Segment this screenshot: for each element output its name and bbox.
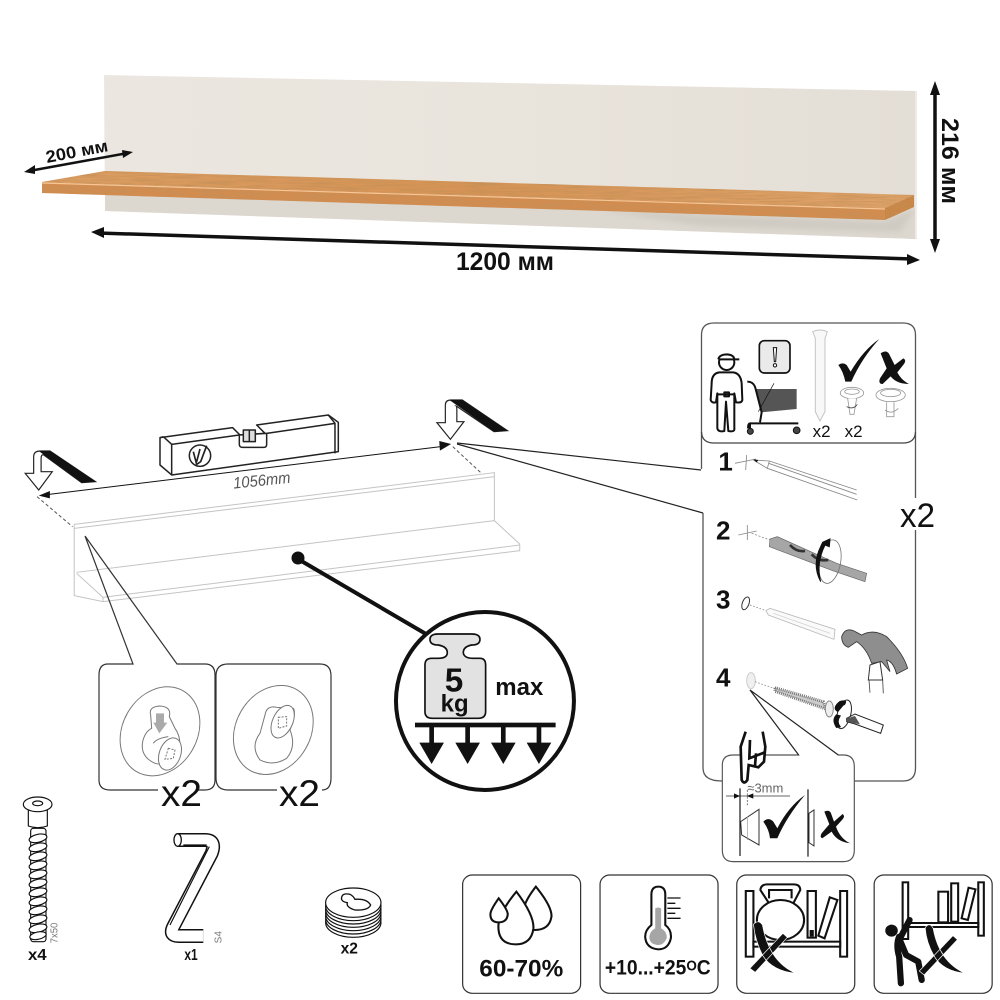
label: x2 left: x2: [161, 773, 202, 814]
badge circle: kg: [441, 690, 469, 717]
dimension: 200 mm depth: 200 мм: [44, 136, 110, 167]
dimension: 200 mm depth: [24, 136, 133, 174]
dimension arrow: 1056mm: [37, 441, 482, 527]
icon: correct screw: [840, 387, 864, 414]
product photo: wall shelf: [42, 75, 917, 239]
icon: wall plug: [813, 330, 827, 421]
badge circle: 5: [445, 663, 463, 700]
icon: wrong screw: [876, 388, 905, 417]
icon: check mark correct: [763, 795, 805, 838]
icon: cross mark: [879, 352, 909, 384]
step 1: pencil marking: [718, 446, 857, 500]
line drawing of shelf: [74, 473, 520, 602]
card: temperature: +10...+25: [605, 956, 697, 979]
step 4: driving screw: [716, 663, 883, 733]
keyhole plates: [104, 671, 329, 790]
panel: wall fixing steps: [702, 323, 935, 862]
icon: warning sign: [759, 341, 790, 373]
panel: hanging plate detail, left and right: [85, 536, 331, 814]
pointer and left box: [85, 536, 215, 790]
maximum load badge: 5 kg: [292, 552, 574, 790]
oak shelf board: [42, 171, 914, 220]
leader with dot: [292, 552, 426, 634]
dimension: 1200 mm width: [91, 227, 920, 276]
back panel: [104, 75, 917, 239]
cross mark: [750, 922, 796, 973]
label: x2: x2: [900, 497, 935, 535]
step 3: hammering plug: 3: [716, 584, 730, 614]
label: x1: x1: [184, 947, 198, 964]
card: humidity: [463, 875, 581, 993]
label: S4: S4: [214, 931, 225, 943]
card: no heavy loads: [737, 875, 855, 993]
icon: check mark: [838, 339, 879, 382]
hanging plates stack: [326, 888, 381, 937]
right box: [216, 664, 331, 790]
dimension: 216 mm height: [930, 81, 963, 253]
label: 7x50: 7x50: [50, 922, 61, 943]
icon: spirit level: [160, 415, 338, 475]
panel outline: [702, 323, 916, 781]
badge circle: max: [495, 674, 544, 701]
card: no climbing: [874, 875, 992, 993]
icon: hand pointing: [741, 732, 765, 782]
step 4: driving screw: 4: [716, 663, 731, 693]
dimension: 1200 mm width: 1200 мм: [456, 248, 554, 276]
dimension arrow: 1056mm: 1056mm: [232, 469, 291, 493]
label: plug and screw quantity: x2: [813, 422, 831, 441]
callout: gap detail: [722, 690, 854, 862]
label: 3mm gap: ≈3mm: [747, 781, 783, 796]
care icons row: [463, 875, 992, 993]
card: humidity: 60-70%: [479, 956, 563, 983]
panel: wall fixing steps: x2: [845, 422, 863, 441]
header divider: [702, 432, 916, 443]
icon: shopping cart: [747, 382, 800, 434]
step 3: hammering plug: [716, 584, 908, 693]
hardware: connector screw: [23, 797, 381, 964]
icon: left drill marker arrow: [25, 451, 96, 490]
step 2: drilling: [716, 516, 867, 585]
hex key: [170, 834, 213, 936]
cross mark: [919, 925, 965, 975]
icon: right drill marker arrow: [437, 400, 508, 439]
label: x4: x4: [28, 947, 47, 964]
mounting diagram: [25, 400, 520, 602]
label: x2: x2: [341, 940, 358, 957]
card: temperature: [600, 875, 718, 993]
label: x2 right: x2: [279, 773, 320, 814]
dimension: 216 mm height: 216 мм: [936, 118, 963, 204]
badge circle: [396, 612, 574, 790]
leader lines to wall anchors steps: [457, 443, 703, 513]
card: temperature: O: [686, 958, 697, 974]
icon: cross mark wrong: [821, 811, 850, 843]
card: temperature: C: [697, 956, 711, 979]
step 1: pencil marking: 1: [718, 446, 733, 476]
step 2: drilling: 2: [716, 516, 730, 546]
icon: worker: [711, 354, 742, 431]
